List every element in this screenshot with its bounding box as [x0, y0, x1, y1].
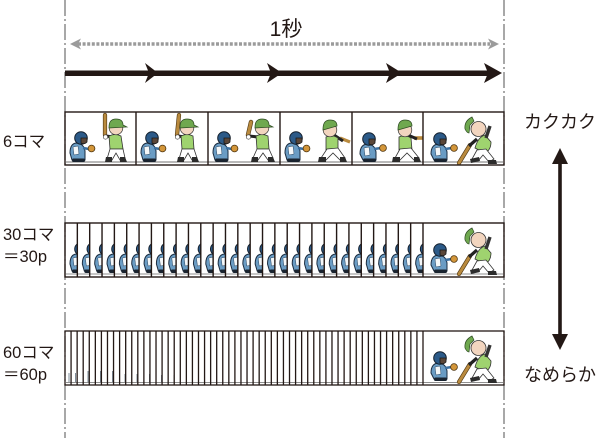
frame 1: batter ready — [70, 115, 127, 162]
right time boundary line — [503, 0, 505, 438]
left time boundary line — [64, 0, 66, 438]
frame outlines — [65, 331, 504, 385]
label: 60 frames = 60p — [3, 344, 54, 384]
label: 30 frames = 30p: ＝30p — [3, 248, 47, 266]
frame 3: batter steps forward — [213, 119, 275, 162]
catcher slivers visible in stacked frames — [70, 243, 441, 273]
last frame: batter misses — [431, 228, 497, 275]
frame 2: batter lifts bat — [141, 115, 199, 162]
frame 6: batter misses, helmet flies — [431, 117, 497, 164]
film strip: 30 frames — [65, 223, 504, 277]
label: 6 frames: 6コマ — [3, 133, 45, 151]
frame 5: ball near the catcher — [360, 120, 423, 162]
label: 30 frames = 30p — [3, 226, 54, 266]
heading: 1 second: 1秒 — [270, 18, 302, 41]
grey dotted double arrow: one-second span — [70, 38, 499, 50]
label: smooth: なめらか — [524, 365, 596, 385]
frame outlines — [65, 112, 504, 165]
black time arrow — [65, 63, 502, 83]
double arrow: choppy to smooth — [552, 148, 568, 350]
film strip: 6 frames — [65, 112, 504, 165]
frame 4: batter swings — [285, 120, 350, 162]
label: choppy: カクカク — [524, 112, 596, 132]
label: 30 frames = 30p: 30コマ — [3, 226, 54, 244]
label: 60 frames = 60p: ＝60p — [3, 366, 47, 384]
frame outlines — [65, 223, 504, 277]
faint catcher traces in narrow frames — [69, 371, 174, 383]
label: 60 frames = 60p: 60コマ — [3, 344, 54, 362]
last frame: batter misses — [431, 336, 497, 383]
film strip: 60 frames — [65, 331, 504, 385]
